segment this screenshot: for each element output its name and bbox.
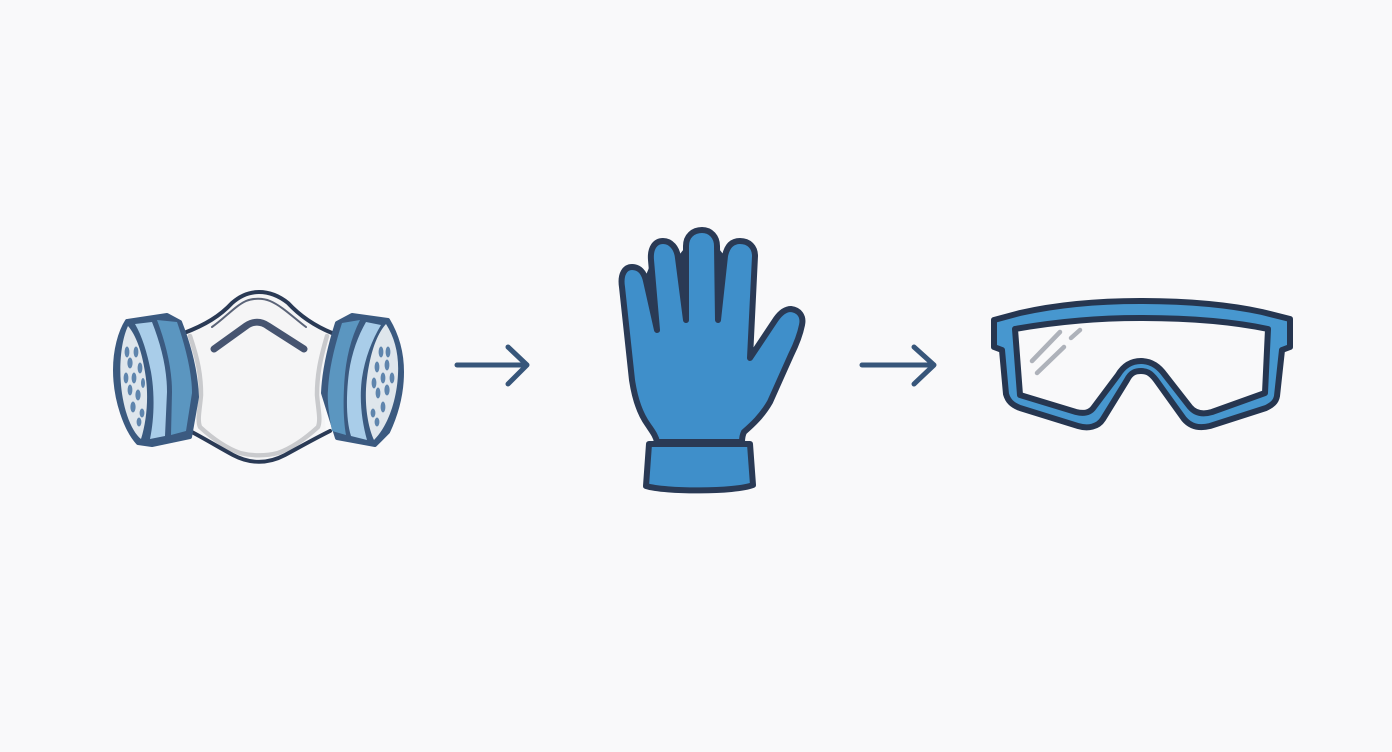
nose wire line xyxy=(212,299,306,327)
left filter cartridge xyxy=(115,315,197,445)
goggle frame xyxy=(994,301,1290,427)
glove cuff xyxy=(646,444,753,490)
arrow: mask to glove xyxy=(457,347,527,384)
lens glints xyxy=(1032,330,1080,373)
icon: safety goggles xyxy=(994,301,1290,427)
icon: glove xyxy=(622,230,802,490)
filter holes xyxy=(371,346,394,426)
finger gaps xyxy=(645,248,725,330)
glove hand xyxy=(622,230,802,442)
filter holes xyxy=(124,346,145,426)
mask body xyxy=(184,292,332,462)
arrow: glove to goggles xyxy=(862,347,934,384)
right filter cartridge xyxy=(323,315,402,445)
icon: respirator mask xyxy=(115,292,402,462)
goggle lens xyxy=(1015,318,1268,413)
nose clip xyxy=(214,322,304,349)
